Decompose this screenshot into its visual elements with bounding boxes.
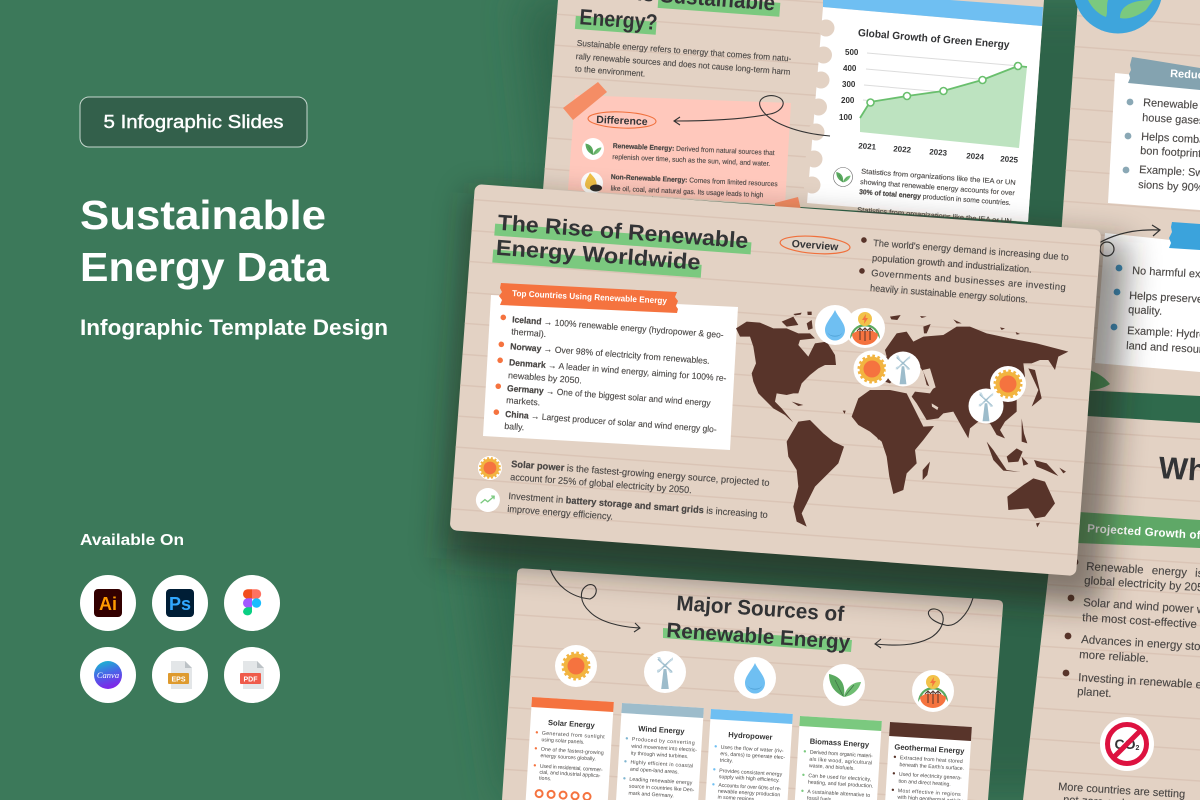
arrow: right (875, 598, 973, 648)
card: solar: using solar panels. (541, 737, 585, 746)
countries list: Iceland → 100% renewable energy (hydropower & geo- (512, 314, 724, 340)
card: wind: Produced by converting (632, 737, 695, 747)
card: hydropower: Provides consistent energy (719, 768, 783, 778)
icon: sun badge (477, 455, 503, 481)
overview bullets (857, 237, 1069, 308)
difference text: replenish over time, such as the sun, wind, and water. (612, 154, 770, 168)
card: biomass: heating, and fuel production. (808, 780, 873, 790)
panel: top countries (483, 283, 738, 450)
map icon: wind east (968, 388, 1004, 424)
tape (563, 82, 607, 120)
heading (579, 0, 776, 43)
icon: photoshop (152, 575, 208, 631)
line chart: 2025 (1000, 154, 1019, 165)
bullets (1123, 99, 1133, 173)
icon: illustrator: Ai (99, 594, 117, 614)
difference pill: Difference (596, 114, 648, 128)
overview pill (780, 234, 851, 256)
card: geothermal: tion and direct heating. (898, 779, 951, 788)
heading highlight (663, 628, 852, 652)
line chart: 2023 (929, 147, 948, 158)
title (495, 210, 749, 278)
card: wind: ity through wind turbines. (631, 751, 689, 760)
paragraph: Sustainable energy refers to energy that comes from natu- (577, 38, 792, 63)
line chart: 300 (842, 80, 856, 89)
card: solar: Generated from sunlight (542, 731, 605, 741)
countries list: newables by 2050. (508, 370, 582, 386)
card: solar: One of the fastest-growing (541, 747, 604, 756)
countries list: Norway → Over 98% of electricity from renewables. (510, 341, 710, 366)
difference text: Non-Renewable Energy: Comes from limited resources (611, 174, 778, 188)
chart title: Global Growth of Green Energy (857, 27, 1010, 51)
heading: Major Sources of (676, 592, 846, 626)
line chart (839, 48, 1027, 165)
card: hydropower: Hydropower (728, 730, 773, 742)
card: wind: and open-land areas. (630, 767, 679, 776)
reduce card (1108, 57, 1200, 210)
line chart: 200 (841, 96, 855, 105)
difference text: Renewable Energy: Derived from natural sources that (613, 143, 775, 157)
card: biomass (795, 716, 882, 800)
clean list: quality. (1128, 304, 1162, 318)
icon: leaf (1070, 369, 1110, 390)
slide: major sources (480, 567, 1006, 800)
countries list: thermal). (511, 326, 547, 339)
overview bullets: heavily in sustainable energy solutions. (870, 283, 1028, 306)
background shading behind slides (475, 0, 1200, 800)
main title (80, 192, 330, 290)
green bar (1077, 512, 1200, 548)
clean list (1126, 265, 1200, 357)
card: wind: mark and Germany. (628, 791, 674, 799)
fact text: account for 25% of global electricity by 2050. (510, 472, 692, 496)
card: geothermal: beneath the Earth's surface. (899, 762, 964, 772)
main title: Energy Data (80, 244, 330, 290)
line chart: 2024 (966, 151, 985, 162)
icon: coal (581, 172, 603, 194)
card: geothermal (885, 722, 972, 800)
arrow: to difference (674, 96, 830, 136)
reduce list: bon footprint (1140, 145, 1200, 160)
card: hydropower: supply with high efficiency. (719, 774, 780, 784)
card: geothermal: Geothermal Energy (894, 742, 965, 756)
countries list: bally. (504, 421, 525, 432)
card: hydropower: newable energy production (718, 789, 780, 798)
countries list (492, 314, 730, 447)
card: wind: wind movement into electric- (631, 744, 697, 754)
map icon: geothermal (845, 308, 885, 348)
icon: photoshop: Ps (169, 594, 191, 614)
line chart: 100 (839, 113, 853, 122)
list: the most cost-effective (1082, 612, 1197, 631)
line chart: 500 (845, 48, 859, 57)
fact text (507, 459, 770, 534)
facts (475, 455, 771, 534)
list (1077, 561, 1200, 700)
card: wind (616, 703, 704, 800)
map icon: solar east (990, 366, 1026, 402)
card: solar: Used in residential, commer- (540, 764, 603, 773)
overview bullets: Governments and businesses are investing (871, 268, 1066, 293)
card: wind: source in countries like Den- (629, 784, 695, 794)
icon: canva (80, 647, 136, 703)
card: hydropower (705, 709, 793, 800)
badge: 5 infographic slides: 5 Infographic Slides (104, 112, 284, 132)
ribbon (499, 283, 678, 313)
paragraph: to the environment. (575, 63, 646, 79)
title: The Rise of Renewable (497, 210, 749, 253)
icon: biomass (823, 664, 865, 706)
icon: solar (555, 645, 597, 687)
difference text: carbon emissions. (610, 195, 667, 204)
icon: eps file: EPS (171, 676, 186, 684)
statistics note: Statistics from organizations like the IEA or UN (861, 169, 1016, 187)
icon: wind (644, 651, 686, 693)
card: hydropower: Uses the flow of water (riv- (720, 745, 784, 755)
card: wind: Wind Energy (638, 724, 686, 736)
difference text (610, 143, 778, 204)
countries list: Germany → One of the biggest solar and wind energy (507, 383, 712, 408)
available on: Available On (80, 532, 184, 549)
clean card (1095, 222, 1200, 372)
world map (736, 312, 1068, 527)
statistics note: Statistics from organizations like the IEA or UN (857, 207, 1012, 225)
countries list: China → Largest producer of solar and wind energy glo- (505, 409, 717, 434)
icon: no CO2: 2 (1136, 745, 1140, 752)
ribbon (1128, 57, 1200, 90)
card: geothermal: Most effective in regions (898, 788, 961, 798)
icon: leaf (582, 138, 604, 160)
icon: leaf badge (834, 168, 852, 186)
ribbon text: Top Countries Using Renewable Energy (512, 288, 667, 306)
card: solar: tions. (539, 776, 552, 782)
card: solar: energy sources globally. (540, 753, 596, 763)
subtitle: Infographic Template Design (80, 315, 388, 340)
card: biomass: Biomass Energy (809, 737, 870, 749)
card: geothermal: Used for electricity genera- (899, 772, 962, 781)
overview pill: Overview (791, 238, 840, 253)
icon: trend badge (475, 487, 501, 513)
fact text: Solar power is the fastest-growing energy source, projected to (511, 459, 770, 489)
icon: illustrator (80, 575, 136, 631)
bullets (1063, 559, 1078, 676)
statistics note: showing that renewable energy accounts for over (860, 179, 1016, 197)
dark strip between slides (1080, 390, 1200, 425)
difference text: like oil, coal, and natural gas. Its usage leads to high (610, 186, 764, 199)
heading highlight (575, 0, 780, 44)
icon: no CO2 (1100, 717, 1154, 771)
list: more reliable. (1079, 649, 1149, 665)
card: biomass: als like wood, agricultural (809, 757, 872, 766)
overview bullets: The world's energy demand is increasing due to (873, 238, 1069, 263)
icon: figma (224, 575, 280, 631)
card: biomass: A sustainable alternative to (807, 789, 871, 799)
icon: pdf file (224, 647, 280, 703)
statistics note (857, 169, 1016, 225)
badge: 5 infographic slides (80, 97, 307, 147)
fact text: Investment in battery storage and smart grids is increasing to (508, 491, 768, 521)
reduce list (1138, 97, 1200, 194)
slide: reduces emissions (1062, 0, 1200, 396)
icon: no CO2: CO (1115, 736, 1136, 752)
arrow (1099, 225, 1160, 256)
card: biomass: Can be used for electricity, (808, 773, 871, 783)
heading: Renewable Energy (666, 619, 851, 654)
countries list: Denmark → A leader in wind energy, aiming for 100% re- (509, 357, 727, 383)
ribbon (1169, 222, 1200, 250)
map icon: hydro (815, 305, 855, 345)
icon: geothermal (912, 670, 954, 712)
bullets (1111, 265, 1122, 330)
title: Energy Worldwide (495, 235, 701, 275)
slide: what's next (1023, 416, 1200, 800)
line chart: 2022 (893, 144, 912, 155)
heading: Energy? (579, 4, 658, 35)
card: solar (526, 697, 614, 800)
card: hydropower: Accounts for over 60% of re- (718, 783, 782, 792)
card: wind: Highly efficient in coastal (630, 760, 693, 769)
card: hydropower: ers, dams) to generate elec- (720, 751, 785, 761)
line chart: 400 (843, 64, 857, 73)
card: biomass: waste, and biofuels. (809, 763, 855, 772)
card: wind: Leading renewable energy (629, 777, 693, 786)
panel: difference (563, 82, 801, 210)
overview bullets: population growth and industrialization. (872, 253, 1032, 276)
card: solar: Solar Energy (548, 718, 596, 730)
countries list: markets. (506, 395, 541, 408)
title highlight (492, 224, 751, 281)
card: biomass: Derived from organic materi- (810, 750, 873, 760)
fact text: improve energy efficiency. (507, 504, 613, 523)
card: solar: cial, and industrial applica- (539, 770, 601, 779)
icon: pdf file: PDF (244, 676, 258, 684)
icon: water (734, 657, 776, 699)
map icon: solar (854, 350, 890, 388)
slide: rise of renewable energy (450, 184, 1101, 576)
main title: Sustainable (80, 192, 326, 238)
icon: eps file (152, 647, 208, 703)
paragraph: rally renewable sources and does not cause long-term harm (576, 51, 791, 77)
panel: chart card (804, 0, 1043, 225)
card: hydropower: tricity. (720, 758, 733, 764)
line chart: 2021 (858, 141, 877, 152)
tape corner (775, 197, 801, 210)
icon: canva: Canva (97, 670, 119, 680)
heading (666, 592, 851, 654)
arrow: left (550, 569, 640, 632)
map icon: wind (886, 352, 920, 386)
paragraph (575, 38, 792, 89)
difference pill (588, 111, 656, 129)
slide: what is sustainable energy (543, 0, 1044, 224)
list: planet. (1077, 686, 1112, 700)
icon: globe (1074, 0, 1162, 34)
card: geothermal: Extracted from heat stored (900, 755, 963, 765)
statistics note: 30% of total energy production in some countries. (859, 189, 1011, 207)
blue header (823, 0, 1043, 26)
main slide shadow (441, 194, 1129, 607)
scalloped edge (804, 20, 834, 194)
